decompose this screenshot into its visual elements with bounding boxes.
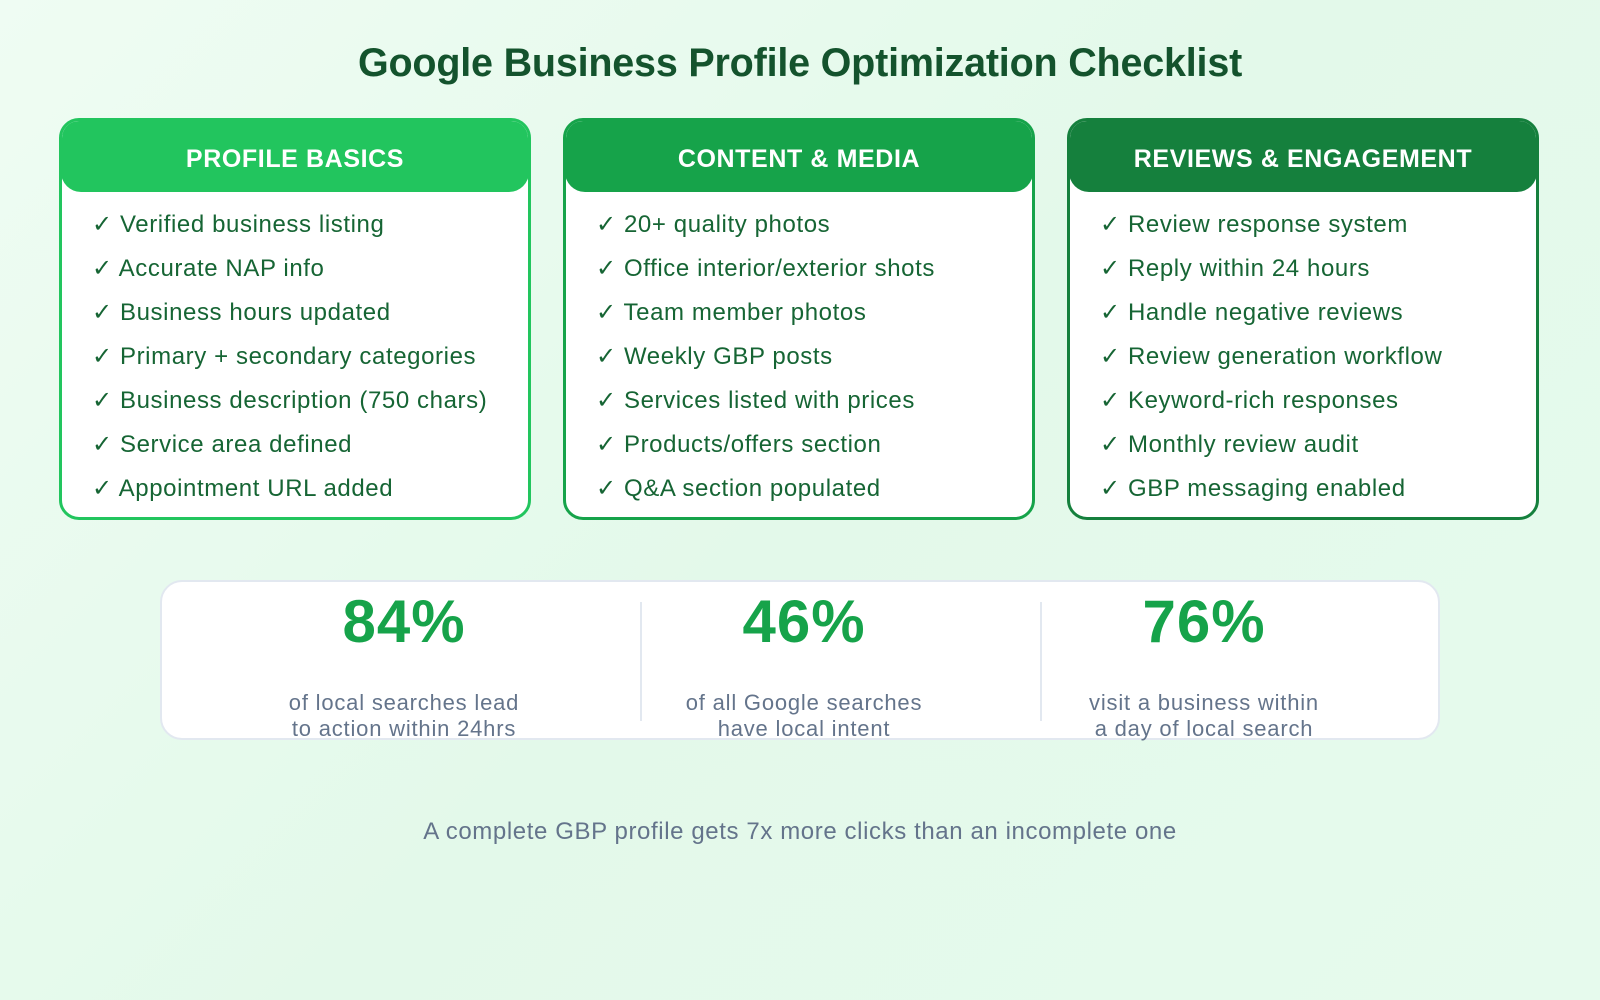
header: content & media	[565, 120, 1033, 192]
checklist: profile basics: ✓ Primary + secondary categories	[92, 343, 476, 370]
checklist: profile basics	[92, 211, 487, 502]
stat: 84%	[289, 588, 519, 741]
stat: 76%: 76%	[1142, 588, 1266, 655]
header: profile basics: PROFILE BASICS	[186, 145, 404, 173]
checklist: reviews & engagement: ✓ GBP messaging enabled	[1100, 475, 1406, 502]
checklist: reviews & engagement: ✓ Review response system	[1100, 211, 1408, 238]
stat: 46%: have local intent	[718, 716, 890, 741]
checklist: content & media: ✓ Weekly GBP posts	[596, 343, 833, 370]
stat: 84%: 84%	[342, 588, 466, 655]
header: content & media: CONTENT & MEDIA	[678, 145, 920, 173]
stat: 46%	[686, 588, 922, 741]
checklist: content & media: ✓ 20+ quality photos	[596, 211, 830, 238]
checklist: profile basics: ✓ Accurate NAP info	[92, 255, 325, 282]
stats panel	[160, 580, 1440, 740]
panel: reviews & engagement	[1067, 118, 1539, 520]
checklist: content & media: ✓ Office interior/exterior shots	[596, 255, 935, 282]
stat: 46%: of all Google searches	[686, 690, 922, 715]
checklist: content & media: ✓ Team member photos	[596, 299, 866, 326]
header: profile basics	[61, 120, 529, 192]
header: reviews & engagement: REVIEWS & ENGAGEMENT	[1134, 145, 1472, 173]
checklist: reviews & engagement: ✓ Handle negative reviews	[1100, 299, 1403, 326]
stat: 84%: of local searches lead	[289, 690, 519, 715]
checklist: reviews & engagement: ✓ Review generation workflow	[1100, 343, 1442, 370]
checklist: profile basics: ✓ Business hours updated	[92, 299, 391, 326]
checklist: reviews & engagement: ✓ Reply within 24 hours	[1100, 255, 1370, 282]
stat: 76%: a day of local search	[1095, 716, 1313, 741]
panel: profile basics	[59, 118, 531, 520]
checklist: profile basics: ✓ Verified business listing	[92, 211, 384, 238]
checklist: reviews & engagement	[1100, 211, 1442, 502]
checklist: content & media: ✓ Products/offers section	[596, 431, 881, 458]
stat: 76%	[1089, 588, 1319, 741]
checklist: reviews & engagement: ✓ Keyword-rich responses	[1100, 387, 1399, 414]
checklist: content & media	[596, 211, 935, 502]
stat: 46%: 46%	[742, 588, 866, 655]
checklist: content & media: ✓ Services listed with prices	[596, 387, 915, 414]
checklist: content & media: ✓ Q&A section populated	[596, 475, 881, 502]
header: reviews & engagement	[1069, 120, 1537, 192]
stat: 84%: to action within 24hrs	[292, 716, 516, 741]
title: Google Business Profile Optimization Checklist	[358, 41, 1242, 85]
checklist: profile basics: ✓ Business description (750 chars)	[92, 387, 487, 414]
checklist: profile basics: ✓ Appointment URL added	[92, 475, 393, 502]
stat: 76%: visit a business within	[1089, 690, 1319, 715]
checklist: profile basics: ✓ Service area defined	[92, 431, 352, 458]
footer note: A complete GBP profile gets 7x more clicks than an incomplete one	[423, 818, 1177, 845]
checklist: reviews & engagement: ✓ Monthly review audit	[1100, 431, 1359, 458]
panel: content & media	[563, 118, 1035, 520]
